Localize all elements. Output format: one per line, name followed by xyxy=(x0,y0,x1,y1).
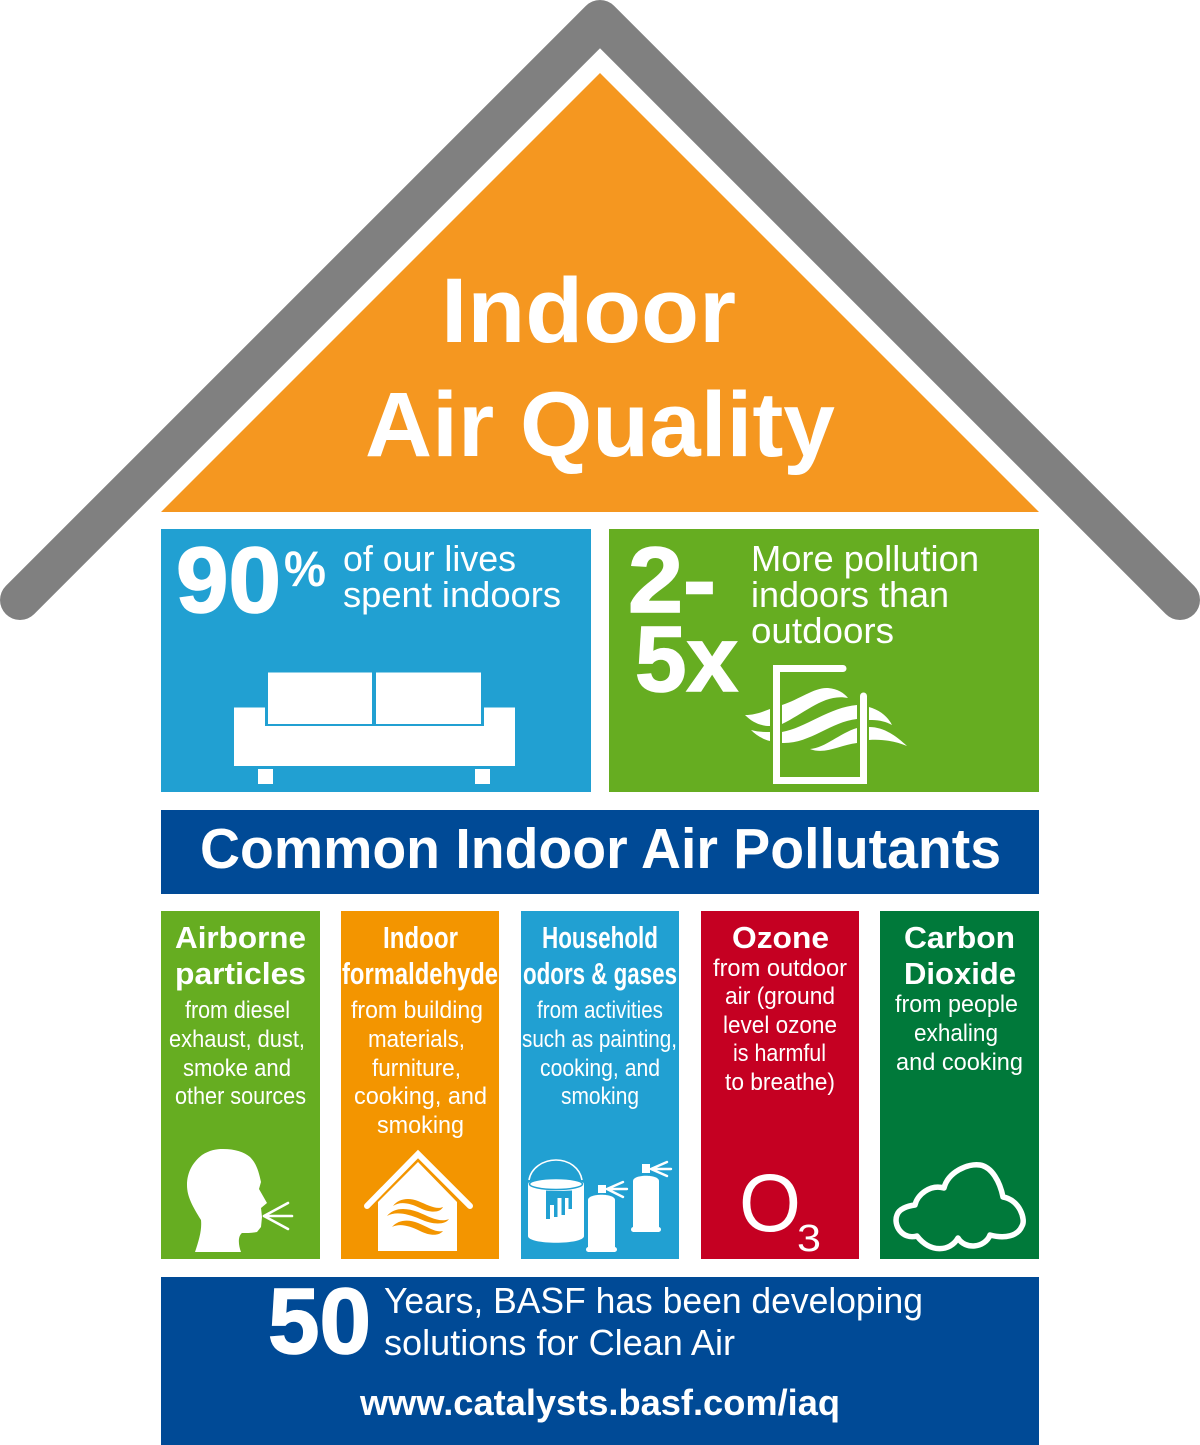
text: formaldehyde description: cooking, and xyxy=(354,1083,487,1110)
text: of our lives spent indoors: of our lives xyxy=(343,538,516,579)
icon: sofa xyxy=(234,672,515,784)
text: household description: cooking, and xyxy=(540,1055,660,1082)
title: Air Quality xyxy=(365,374,835,476)
heading: carbon dioxide: Dioxide xyxy=(904,956,1016,991)
panel: 2-5x more pollution xyxy=(609,528,1039,792)
text: ozone description: to breathe) xyxy=(725,1069,835,1096)
text: carbon dioxide description: and cooking xyxy=(896,1049,1023,1076)
heading: household odors and gases xyxy=(523,920,677,991)
text: more pollution indoors than outdoors: indoors than xyxy=(751,574,949,615)
text: ozone description xyxy=(713,955,847,1096)
panel: household odors and gases xyxy=(521,911,679,1259)
icon: O3 symbol: O xyxy=(739,1158,801,1249)
text: ozone description: level ozone xyxy=(723,1012,837,1039)
icon: O3 symbol xyxy=(739,1158,821,1260)
text: ozone description: air (ground xyxy=(725,983,835,1010)
heading: indoor formaldehyde: formaldehyde xyxy=(342,956,498,991)
text: household description: from activities xyxy=(537,997,663,1024)
panel: 90 percent indoors xyxy=(161,528,591,792)
text: ozone description: from outdoor xyxy=(713,955,847,982)
text: BASF developing solutions: solutions for Clean Air xyxy=(384,1322,735,1363)
text: carbon dioxide description xyxy=(895,991,1023,1076)
panel: title triangle xyxy=(161,73,1039,512)
text: airborne description: from diesel xyxy=(185,997,290,1024)
heading: airborne particles: particles xyxy=(175,956,306,991)
stat: 90%: % xyxy=(284,541,326,597)
text: BASF developing solutions: Years, BASF has been developing xyxy=(384,1280,923,1321)
heading: airborne particles xyxy=(175,920,306,991)
panel: indoor formaldehyde xyxy=(341,911,499,1259)
stat: 90%: 90 xyxy=(176,528,281,632)
stat: 90% xyxy=(176,528,326,632)
text: of our lives spent indoors: spent indoors xyxy=(343,574,561,615)
text: website: www.catalysts.basf.com/iaq xyxy=(359,1382,840,1423)
text: formaldehyde description xyxy=(351,997,487,1139)
heading: household odors and gases: odors & gases xyxy=(523,956,677,991)
icon: window with air flow xyxy=(745,668,907,780)
text: household description xyxy=(522,997,677,1110)
panel: airborne particles xyxy=(161,911,320,1259)
icon: head exhaling xyxy=(187,1149,292,1252)
stat: 2-5x: 5x xyxy=(635,607,738,711)
title xyxy=(365,260,835,476)
text: airborne description: smoke and xyxy=(183,1055,291,1082)
panel: ozone xyxy=(701,911,859,1260)
text: household description: such as painting, xyxy=(522,1026,677,1053)
stat: 50 years: 50 xyxy=(268,1269,371,1373)
text: more pollution indoors than outdoors xyxy=(751,538,979,651)
icon: paint can and spray cans xyxy=(528,1160,671,1252)
heading: household odors and gases: Household xyxy=(542,920,658,955)
heading: airborne particles: Airborne xyxy=(175,920,306,955)
heading: carbon dioxide xyxy=(904,920,1016,991)
text: airborne description xyxy=(169,997,306,1110)
heading banner: common indoor air pollutants: Common Indoor Air Pollutants xyxy=(200,817,1001,881)
text: more pollution indoors than outdoors: More pollution xyxy=(751,538,979,579)
text: carbon dioxide description: from people xyxy=(895,991,1018,1018)
icon: house with fumes xyxy=(367,1154,470,1251)
text: of our lives spent indoors xyxy=(343,538,561,615)
heading: ozone: Ozone xyxy=(732,920,829,955)
text: carbon dioxide description: exhaling xyxy=(914,1020,998,1047)
stat: 2-5x xyxy=(628,528,738,711)
panel: BASF footer xyxy=(161,1269,1039,1445)
house roof xyxy=(20,20,1180,600)
text: airborne description: exhaust, dust, xyxy=(169,1026,305,1053)
text: BASF developing solutions xyxy=(384,1280,923,1363)
text: formaldehyde description: smoking xyxy=(377,1112,464,1139)
text: airborne description: other sources xyxy=(175,1083,306,1110)
text: ozone description: is harmful xyxy=(733,1040,826,1067)
stat: 2-5x: 2- xyxy=(628,528,716,632)
text: more pollution indoors than outdoors: outdoors xyxy=(751,610,894,651)
text: formaldehyde description: furniture, xyxy=(372,1055,461,1082)
text: formaldehyde description: from building xyxy=(351,997,483,1024)
text: formaldehyde description: materials, xyxy=(368,1026,465,1053)
icon: cloud xyxy=(896,1165,1023,1249)
title: Indoor xyxy=(441,260,736,362)
text: household description: smoking xyxy=(561,1083,639,1110)
heading: carbon dioxide: Carbon xyxy=(904,920,1015,955)
icon: O3 symbol: 3 xyxy=(797,1218,821,1260)
heading: indoor formaldehyde: Indoor xyxy=(383,920,458,955)
panel: carbon dioxide xyxy=(880,911,1039,1259)
heading: indoor formaldehyde xyxy=(342,920,498,991)
